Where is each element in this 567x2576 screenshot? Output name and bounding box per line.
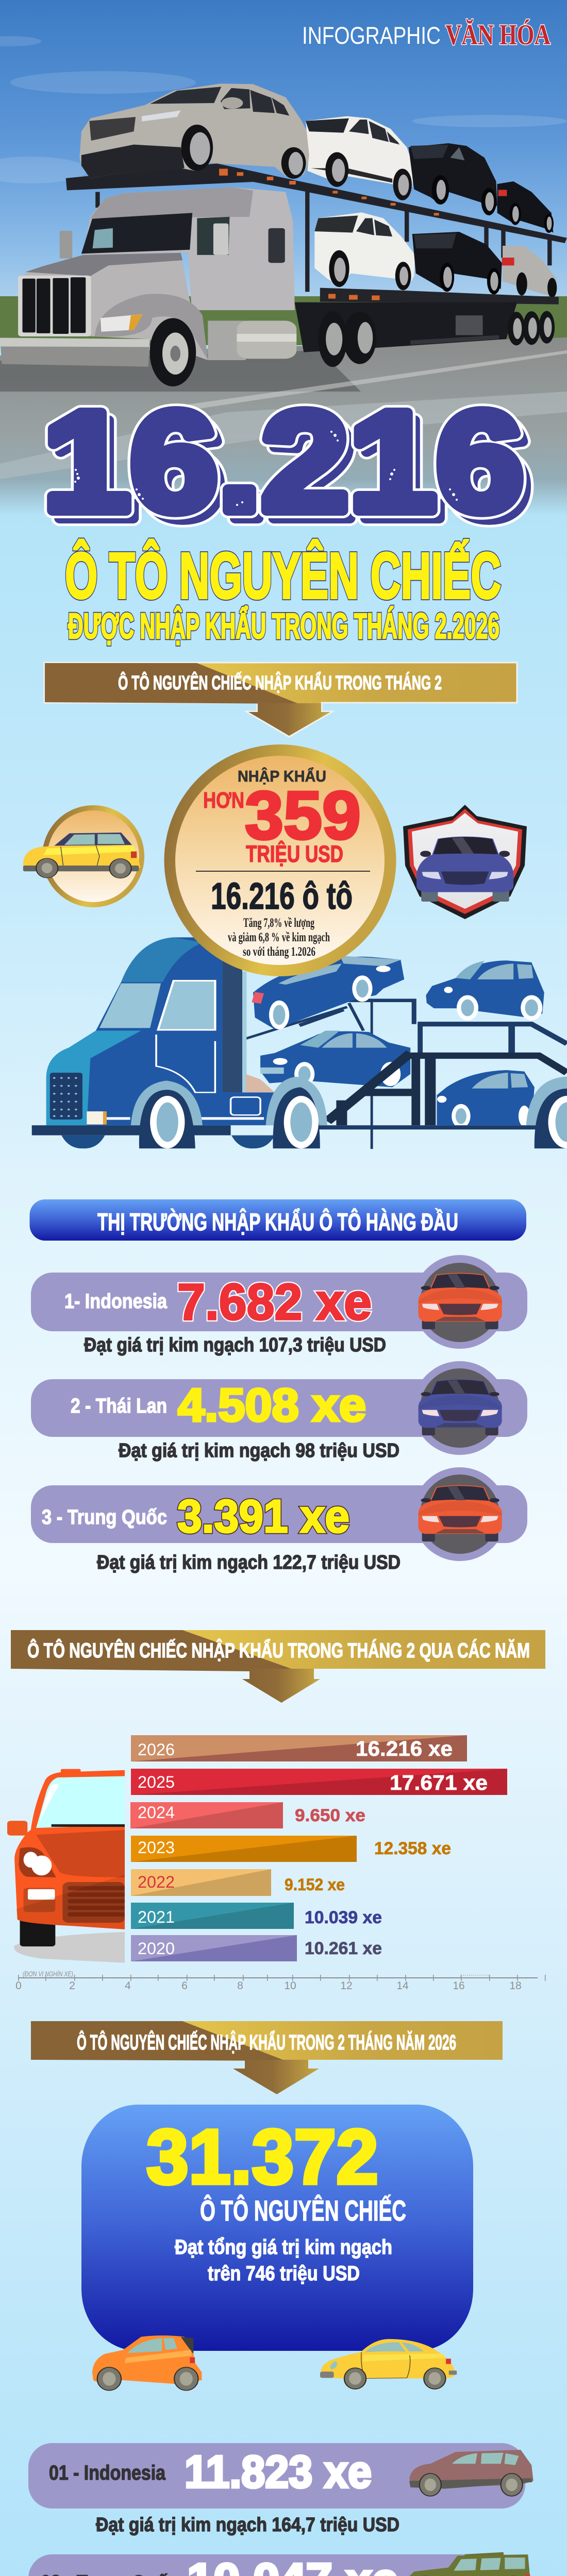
icon: green jeep <box>403 2553 533 2576</box>
silver SUV <box>79 83 310 179</box>
panel: market 2 Thái Lan <box>31 1361 527 1462</box>
bar 2020 <box>131 1935 382 1961</box>
panel: market Indonesia 2 months: Đạt giá trị kim ngạch 164,7 triệu USD <box>96 2514 399 2536</box>
callout: imports circle: và giảm 6,8 % về kim ngạch <box>228 930 330 944</box>
panel: two-month total: trên 746 triệu USD <box>208 2262 360 2285</box>
icon: yellow car in circle <box>23 805 144 907</box>
bar 2023 <box>131 1836 451 1862</box>
panel: market 1 Indonesia: 7.682 xe <box>177 1273 372 1330</box>
panel: market 3 Trung Quốc: 3 - Trung Quốc <box>42 1506 167 1529</box>
panel: market 1 Indonesia <box>31 1255 527 1356</box>
icon: shield with blue car <box>403 805 527 919</box>
icon: orange small car <box>92 2335 202 2391</box>
bar 2020: 2020 <box>138 1939 175 1958</box>
callout: imports circle <box>164 744 396 976</box>
panel: market 3 Trung Quốc <box>31 1467 527 1573</box>
hero photo: car carrier truck <box>0 0 567 515</box>
panel: market Indonesia 2 months: 11.823 xe <box>185 2446 372 2497</box>
heading: big number 16.216: 16.216 <box>43 382 524 541</box>
chart axis: 4 <box>125 1980 131 1992</box>
chart axis: 2 <box>69 1980 75 1992</box>
chart axis: 0 <box>15 1980 22 1992</box>
logo: top <box>302 19 551 51</box>
bar 2021: 10.039 xe <box>305 1908 382 1927</box>
cars on top deck <box>246 1001 567 1149</box>
wheels <box>131 1080 203 1125</box>
bar 2025: 17.671 xe <box>390 1771 488 1794</box>
trailer chassis <box>320 288 559 304</box>
black SUV <box>409 143 497 215</box>
bar 2024: 9.650 xe <box>295 1806 365 1825</box>
panel: market 3 Trung Quốc: 3.391 xe <box>177 1491 349 1543</box>
panel: two-month total: Đạt tổng giá trị kim ngạch <box>175 2236 392 2259</box>
banner: 2 tháng năm 2026 <box>31 2021 503 2094</box>
bar 2021: 2021 <box>138 1908 175 1926</box>
bar chart: imports by year <box>130 1735 507 1961</box>
panel: market Trung Quốc 2 months <box>28 2553 533 2576</box>
banner: qua các năm <box>11 1630 545 1703</box>
logo: top: INFOGRAPHIC <box>302 22 441 49</box>
bar 2025: 2025 <box>138 1773 175 1791</box>
panel: market Indonesia 2 months: 01 - Indonesia <box>49 2462 166 2484</box>
bar 2026 <box>131 1735 467 1761</box>
black sedan <box>497 181 553 233</box>
bar 2022: 2022 <box>138 1873 175 1891</box>
bar 2025 <box>131 1769 507 1795</box>
panel: market 1 Indonesia: 7.682 xe <box>177 1273 372 1330</box>
panel: market 1 Indonesia: 1- Indonesia <box>64 1290 168 1313</box>
icon: brown SUV <box>409 2450 533 2496</box>
bar 2026: 2026 <box>138 1740 175 1759</box>
callout: imports circle: NHẬP KHẨU <box>238 767 326 785</box>
heading: big number 16.216: 16.216 <box>50 390 531 549</box>
chart axis: 14 <box>396 1980 409 1992</box>
banner: tháng 2 <box>44 663 517 737</box>
chart axis: 16 <box>453 1980 465 1992</box>
cab <box>83 187 295 310</box>
callout: imports circle: TRIỆU USD <box>246 841 343 867</box>
panel: market 2 Thái Lan: 4.508 xe <box>178 1380 366 1431</box>
bar 2024 <box>130 1802 365 1828</box>
bar 2023: 2023 <box>138 1838 175 1857</box>
heading: big number 16.216: 16.216 <box>50 390 531 549</box>
bar 2024: 2024 <box>138 1803 175 1822</box>
panel: market 3 Trung Quốc: 3.391 xe <box>177 1491 349 1543</box>
trailer frame <box>327 1053 567 1125</box>
heading: big number 16.216: 16.216 <box>43 382 524 541</box>
callout: imports circle: 16.216 ô tô <box>211 876 353 917</box>
chart axis: 10 <box>284 1980 296 1992</box>
bar 2021 <box>131 1903 382 1929</box>
bar 2023: 12.358 xe <box>374 1839 451 1858</box>
panel: market 2 Thái Lan: 2 - Thái Lan <box>71 1395 167 1417</box>
panel: two-month total: 31.372 <box>146 2113 378 2200</box>
cab <box>32 1125 231 1136</box>
callout: imports circle: HƠN <box>203 788 244 813</box>
upper deck <box>66 163 567 243</box>
bar 2020: 10.261 xe <box>305 1939 382 1958</box>
white SUV <box>306 116 414 200</box>
icon: yellow beetle car <box>320 2339 457 2389</box>
chart axis: (ĐƠN VỊ NGHÌN XE) <box>23 1970 73 1978</box>
panel: two-month total <box>81 2105 473 2351</box>
callout: imports circle: so với tháng 1.2026 <box>243 945 315 959</box>
chart axis <box>15 1970 545 1992</box>
bar 2026: 16.216 xe <box>356 1737 453 1760</box>
panel: market Indonesia 2 months <box>28 2443 533 2536</box>
bar 2022: 9.152 xe <box>285 1875 345 1894</box>
bar 2022 <box>131 1869 345 1896</box>
chart axis: 6 <box>181 1980 188 1992</box>
chart axis: 18 <box>509 1980 522 1992</box>
panel: market 3 Trung Quốc: Đạt giá trị kim ngạch 122,7 triệu USD <box>97 1552 401 1573</box>
callout: imports circle: 359 <box>245 777 361 853</box>
illustration: blue car carrier truck <box>32 937 567 1149</box>
chart axis: 8 <box>237 1980 243 1992</box>
heading: top import markets <box>30 1199 526 1241</box>
callout: imports circle: Tăng 7,8% về lượng <box>243 916 314 930</box>
chart axis: 12 <box>340 1980 353 1992</box>
icon: orange car front <box>7 1769 125 1963</box>
panel: market 1 Indonesia: Đạt giá trị kim ngạch 107,3 triệu USD <box>84 1334 386 1356</box>
lower row cars <box>314 212 415 289</box>
panel: market 2 Thái Lan: Đạt giá trị kim ngạch 98 triệu USD <box>119 1440 399 1462</box>
panel: two-month total: Ô TÔ NGUYÊN CHIẾC <box>200 2194 406 2227</box>
